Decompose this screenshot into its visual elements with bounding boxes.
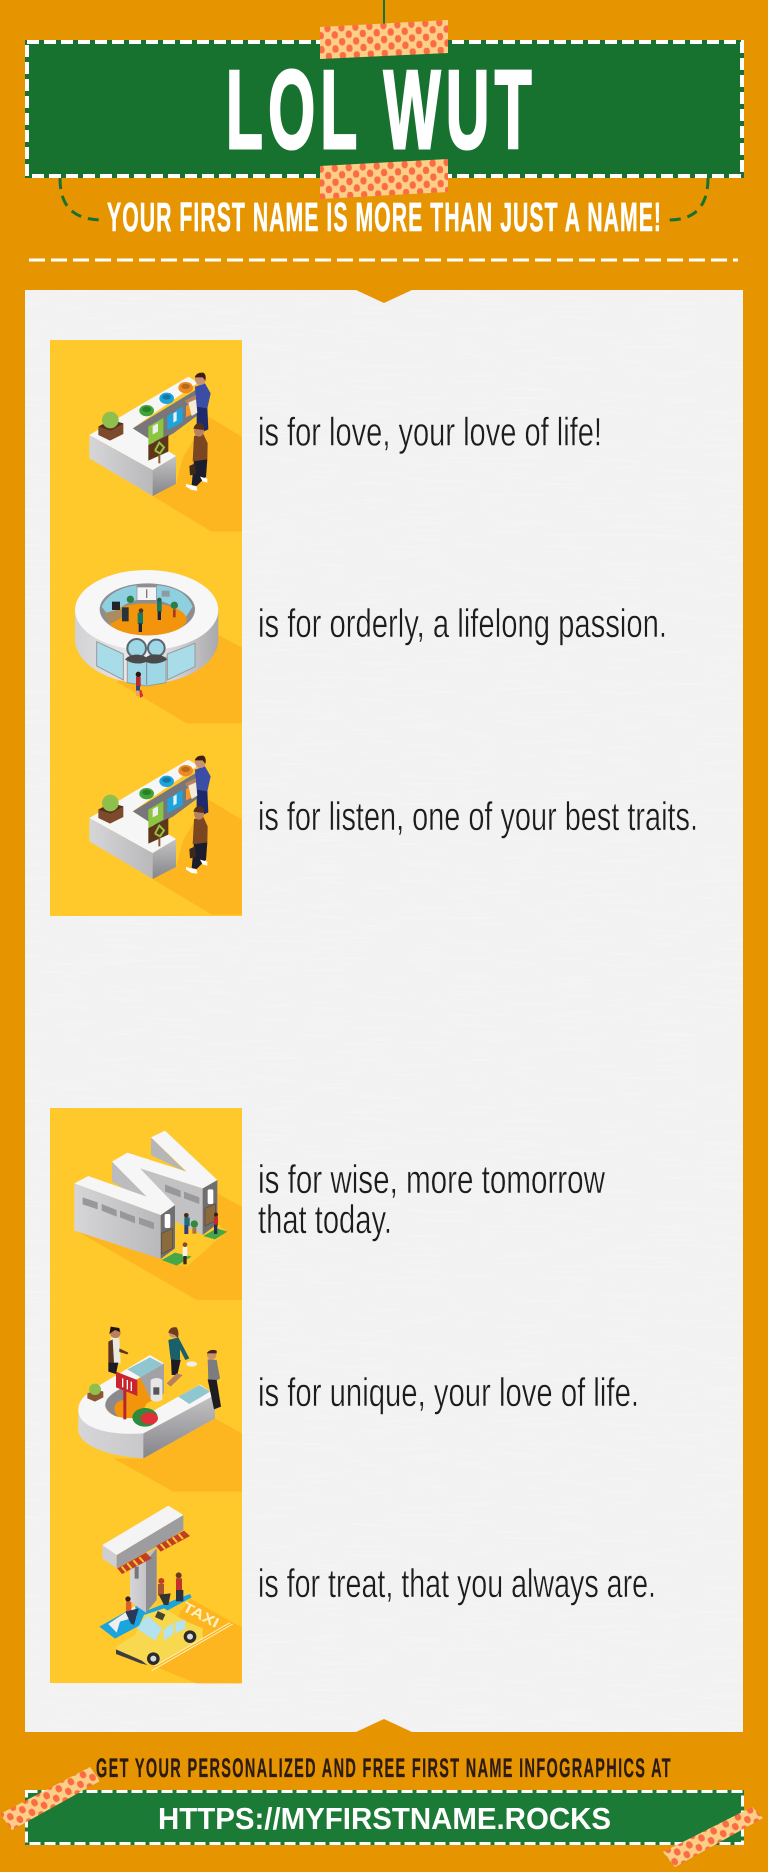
icon: letter O optician building [75, 570, 242, 723]
icon: letter L recycling counter repeated [89, 756, 242, 915]
icon: letter L recycling counter [89, 373, 242, 532]
tape: bottom [320, 159, 448, 199]
taxi ground label: TAXI [180, 1599, 222, 1631]
text: W [258, 1158, 605, 1242]
yellow column: lower [50, 1108, 242, 1683]
footer URL: HTTPS://MYFIRSTNAME.ROCKS [158, 1801, 611, 1836]
text: W: is for wise, more tomorrow [258, 1158, 605, 1202]
tape: footer right [663, 1807, 763, 1867]
white content panel [25, 290, 743, 1732]
header banner [25, 40, 744, 178]
text: W: that today. [258, 1198, 392, 1242]
yellow column: upper [50, 340, 242, 916]
text: L: is for love, your love of life! [258, 411, 602, 455]
icon: letter T taxi stand [99, 1506, 242, 1683]
hanging line [383, 0, 385, 24]
left dashed connector [60, 178, 103, 220]
tape: top [320, 20, 448, 59]
tape: footer left [0, 1767, 100, 1830]
dashed divider [29, 258, 738, 262]
icon: letter W restroom building [74, 1131, 242, 1300]
right dashed connector [669, 178, 708, 220]
text: U: is for unique, your love of life. [258, 1371, 639, 1415]
footer banner [25, 1790, 744, 1845]
icon: letter U restaurant counter [78, 1327, 242, 1492]
